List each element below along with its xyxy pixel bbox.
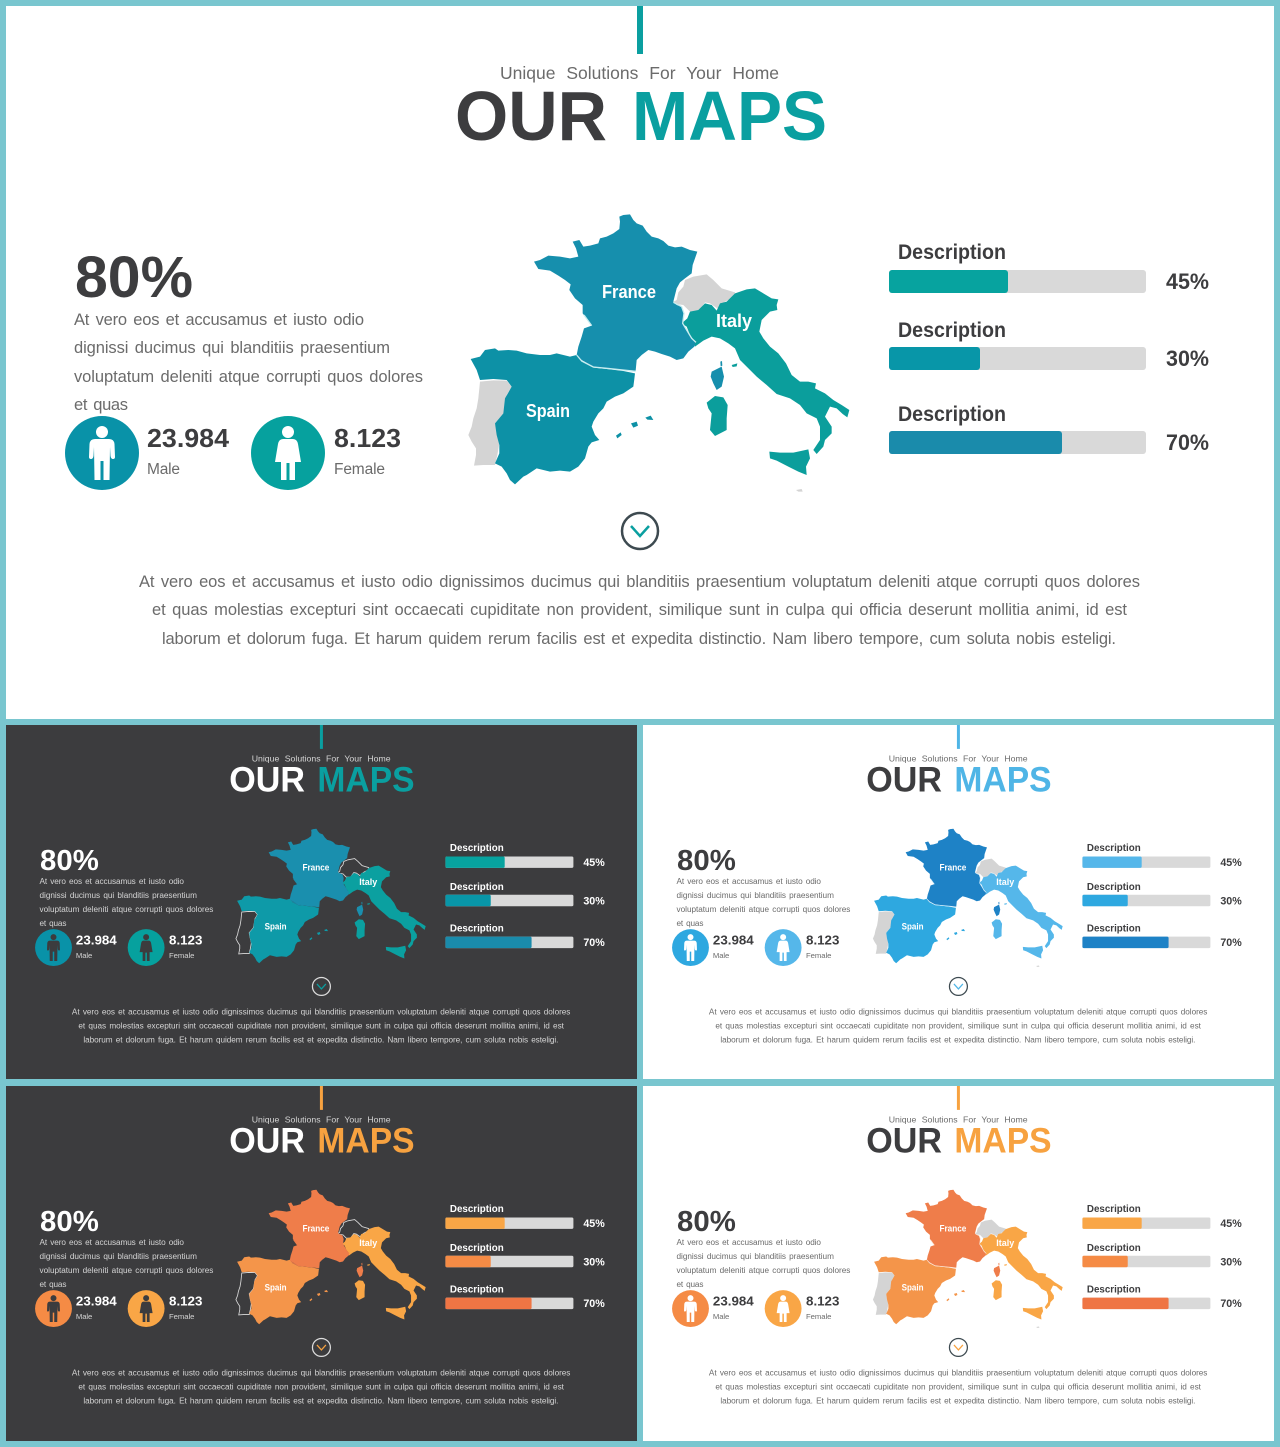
icon: chevron circle xyxy=(622,513,658,549)
bar 45%: Description xyxy=(898,241,1006,264)
bottom paragraph: laborum et dolorum fuga. Et harum quidem rerum facilis est et expedita distinctio. Nam libero tempore, cum soluta nobis esteligi. xyxy=(720,1036,1195,1045)
bar 70%: Description xyxy=(450,924,504,935)
slide: dark orange xyxy=(6,1086,637,1441)
female stat xyxy=(765,929,839,966)
icon: chevron circle xyxy=(949,977,967,995)
map: Italy xyxy=(359,877,377,887)
map: France xyxy=(302,862,329,872)
title: OUR xyxy=(229,761,305,800)
bar 30% xyxy=(1082,882,1242,907)
female stat: Female xyxy=(806,1312,831,1321)
male stat xyxy=(35,929,118,966)
map: Spain xyxy=(902,1283,924,1293)
bar 45%: 45% xyxy=(583,1218,605,1230)
male stat: Male xyxy=(713,951,729,960)
bar 70% xyxy=(1082,1285,1242,1310)
side text: At vero eos et accusamus et iusto odio xyxy=(677,877,821,886)
male stat: 23.984 xyxy=(713,1294,755,1309)
bar 45% xyxy=(1082,843,1242,869)
bar 70%: 70% xyxy=(1166,430,1209,455)
female stat: Female xyxy=(169,951,194,960)
bottom paragraph: et quas molestias excepturi sint occaecati cupiditate non provident, similique sunt in culpa qui officia deserunt mollitia animi, id est xyxy=(715,1382,1202,1391)
female stat: 8.123 xyxy=(169,933,202,948)
title xyxy=(229,1122,415,1161)
bottom paragraph: At vero eos et accusamus et iusto odio dignissimos ducimus qui blanditiis praesentium voluptatum deleniti atque corrupti quos dolores xyxy=(709,1368,1207,1377)
map: Spain xyxy=(265,922,287,932)
map: France xyxy=(939,1223,966,1233)
bar 30% xyxy=(889,319,1209,371)
icon: chevron circle xyxy=(312,977,330,995)
male stat: 23.984 xyxy=(76,933,118,948)
male stat: 23.984 xyxy=(713,933,755,948)
map xyxy=(873,829,1063,967)
bottom paragraph: At vero eos et accusamus et iusto odio dignissimos ducimus qui blanditiis praesentium voluptatum deleniti atque corrupti quos dolores xyxy=(72,1007,570,1016)
female stat xyxy=(128,1290,202,1327)
title xyxy=(866,1122,1052,1161)
subtitle: Unique Solutions For Your Home xyxy=(500,63,779,83)
bar 30%: Description xyxy=(450,882,504,893)
side text: voluptatum deleniti atque corrupti quos dolores xyxy=(40,905,213,914)
bar 30%: 30% xyxy=(583,895,605,907)
bar 30%: 30% xyxy=(583,1256,605,1268)
statistic 80%: 80% xyxy=(677,845,736,877)
bar 70%: Description xyxy=(898,403,1006,426)
male stat: Male xyxy=(76,1312,92,1321)
side text: voluptatum deleniti atque corrupti quos dolores xyxy=(40,1266,213,1275)
female stat: 8.123 xyxy=(169,1294,202,1309)
title: OUR xyxy=(866,1122,942,1161)
side text: At vero eos et accusamus et iusto odio xyxy=(40,877,184,886)
statistic 80%: 80% xyxy=(40,845,99,877)
statistic 80%: 80% xyxy=(40,1206,99,1238)
side text xyxy=(677,877,850,928)
side text xyxy=(74,311,423,414)
subtitle: Unique Solutions For Your Home xyxy=(889,753,1028,763)
title: OUR xyxy=(229,1122,305,1161)
map: Italy xyxy=(996,1238,1014,1248)
bar 30%: Description xyxy=(450,1243,504,1254)
bar 70%: 70% xyxy=(1220,937,1242,949)
side text: dignissi ducimus qui blanditiis praesentium xyxy=(40,891,197,900)
bar 30%: 30% xyxy=(1166,346,1209,371)
title: MAPS xyxy=(632,77,827,155)
title xyxy=(455,77,827,155)
bar 30%: 30% xyxy=(1220,895,1242,907)
bar 70%: 70% xyxy=(1220,1298,1242,1310)
statistic 80%: 80% xyxy=(677,1206,736,1238)
title: MAPS xyxy=(317,761,415,800)
side text: voluptatum deleniti atque corrupti quos dolores xyxy=(677,1266,850,1275)
subtitle: Unique Solutions For Your Home xyxy=(252,1114,391,1124)
female stat xyxy=(765,1290,839,1327)
top accent bar xyxy=(637,6,643,54)
male stat: 23.984 xyxy=(76,1294,118,1309)
map: Spain xyxy=(526,401,570,421)
side text: dignissi ducimus qui blanditiis praesentium xyxy=(677,1252,834,1261)
female stat: Female xyxy=(169,1312,194,1321)
bar 45%: Description xyxy=(450,843,504,854)
female stat: Female xyxy=(334,461,385,478)
bar 30% xyxy=(1082,1243,1242,1268)
bottom paragraph: et quas molestias excepturi sint occaecati cupiditate non provident, similique sunt in culpa qui officia deserunt mollitia animi, id est xyxy=(152,601,1127,619)
side text: et quas xyxy=(74,396,128,414)
bar 45%: 45% xyxy=(1220,857,1242,869)
bar 45% xyxy=(445,843,605,869)
map: Spain xyxy=(902,922,924,932)
bottom paragraph xyxy=(139,573,1140,648)
side text: At vero eos et accusamus et iusto odio xyxy=(40,1238,184,1247)
bottom paragraph xyxy=(72,1368,570,1406)
title: OUR xyxy=(455,77,607,155)
side text: dignissi ducimus qui blanditiis praesentium xyxy=(677,891,834,900)
bar 30%: Description xyxy=(1087,882,1141,893)
bottom paragraph: laborum et dolorum fuga. Et harum quidem rerum facilis est et expedita distinctio. Nam libero tempore, cum soluta nobis esteligi. xyxy=(83,1036,558,1045)
map xyxy=(873,1190,1063,1328)
map xyxy=(468,214,849,492)
bar 70% xyxy=(445,924,605,949)
bar 70% xyxy=(445,1285,605,1310)
bar 70%: 70% xyxy=(583,937,605,949)
bar 70%: 70% xyxy=(583,1298,605,1310)
bottom paragraph: et quas molestias excepturi sint occaecati cupiditate non provident, similique sunt in culpa qui officia deserunt mollitia animi, id est xyxy=(78,1382,565,1391)
male stat xyxy=(672,929,755,966)
map: France xyxy=(602,282,656,302)
side text: et quas xyxy=(677,1280,703,1289)
bottom paragraph: laborum et dolorum fuga. Et harum quidem rerum facilis est et expedita distinctio. Nam libero tempore, cum soluta nobis esteligi. xyxy=(162,630,1116,648)
bar 70% xyxy=(889,403,1209,455)
bar 30%: Description xyxy=(1087,1243,1141,1254)
slide: main light teal xyxy=(6,6,1274,719)
map xyxy=(236,829,426,967)
bar 70%: Description xyxy=(450,1285,504,1296)
top accent bar xyxy=(957,725,960,749)
side text: At vero eos et accusamus et iusto odio xyxy=(677,1238,821,1247)
bar 30% xyxy=(445,882,605,907)
female stat: 8.123 xyxy=(334,423,401,453)
side text: dignissi ducimus qui blanditiis praesentium xyxy=(40,1252,197,1261)
side text xyxy=(40,877,213,928)
side text: At vero eos et accusamus et iusto odio xyxy=(74,311,364,329)
male stat: Male xyxy=(147,461,180,478)
bar 30% xyxy=(445,1243,605,1268)
bottom paragraph: laborum et dolorum fuga. Et harum quidem rerum facilis est et expedita distinctio. Nam libero tempore, cum soluta nobis esteligi. xyxy=(720,1397,1195,1406)
bar 70%: Description xyxy=(1087,924,1141,935)
title: MAPS xyxy=(954,761,1052,800)
male stat xyxy=(65,416,230,490)
male stat xyxy=(672,1290,755,1327)
map xyxy=(236,1190,426,1328)
side text: et quas xyxy=(677,919,703,928)
female stat xyxy=(251,416,401,490)
icon: chevron circle xyxy=(312,1338,330,1356)
map: France xyxy=(939,862,966,872)
bar 45%: 45% xyxy=(1220,1218,1242,1230)
bar 30%: Description xyxy=(898,319,1006,342)
bar 45%: Description xyxy=(1087,1204,1141,1215)
bottom paragraph xyxy=(709,1007,1207,1045)
bar 45% xyxy=(445,1204,605,1230)
map: France xyxy=(302,1223,329,1233)
bar 45%: Description xyxy=(1087,843,1141,854)
title: MAPS xyxy=(317,1122,415,1161)
subtitle: Unique Solutions For Your Home xyxy=(889,1114,1028,1124)
side text: et quas xyxy=(40,1280,66,1289)
map: Italy xyxy=(359,1238,377,1248)
title: MAPS xyxy=(954,1122,1052,1161)
bottom paragraph: At vero eos et accusamus et iusto odio dignissimos ducimus qui blanditiis praesentium voluptatum deleniti atque corrupti quos dolores xyxy=(709,1007,1207,1016)
male stat: Male xyxy=(713,1312,729,1321)
bar 45% xyxy=(1082,1204,1242,1230)
title: OUR xyxy=(866,761,942,800)
bar 70%: Description xyxy=(1087,1285,1141,1296)
bottom paragraph: et quas molestias excepturi sint occaecati cupiditate non provident, similique sunt in culpa qui officia deserunt mollitia animi, id est xyxy=(78,1021,565,1030)
bottom paragraph: At vero eos et accusamus et iusto odio dignissimos ducimus qui blanditiis praesentium voluptatum deleniti atque corrupti quos dolores xyxy=(139,573,1140,591)
bottom paragraph: et quas molestias excepturi sint occaecati cupiditate non provident, similique sunt in culpa qui officia deserunt mollitia animi, id est xyxy=(715,1021,1202,1030)
side text xyxy=(677,1238,850,1289)
side text: et quas xyxy=(40,919,66,928)
top accent bar xyxy=(320,1086,323,1110)
female stat xyxy=(128,929,202,966)
bottom paragraph: laborum et dolorum fuga. Et harum quidem rerum facilis est et expedita distinctio. Nam libero tempore, cum soluta nobis esteligi. xyxy=(83,1397,558,1406)
slide: dark teal xyxy=(6,725,637,1079)
top accent bar xyxy=(320,725,323,749)
bottom paragraph xyxy=(709,1368,1207,1406)
top accent bar xyxy=(957,1086,960,1110)
bar 45%: Description xyxy=(450,1204,504,1215)
female stat: 8.123 xyxy=(806,1294,839,1309)
bottom paragraph xyxy=(72,1007,570,1045)
female stat: 8.123 xyxy=(806,933,839,948)
map: Italy xyxy=(716,311,752,331)
bar 45%: 45% xyxy=(1166,269,1209,294)
side text: voluptatum deleniti atque corrupti quos dolores xyxy=(677,905,850,914)
icon: chevron circle xyxy=(949,1338,967,1356)
bottom paragraph: At vero eos et accusamus et iusto odio dignissimos ducimus qui blanditiis praesentium voluptatum deleniti atque corrupti quos dolores xyxy=(72,1368,570,1377)
title xyxy=(866,761,1052,800)
bar 45% xyxy=(889,241,1209,294)
map: Spain xyxy=(265,1283,287,1293)
male stat: Male xyxy=(76,951,92,960)
side text xyxy=(40,1238,213,1289)
bar 45%: 45% xyxy=(583,857,605,869)
female stat: Female xyxy=(806,951,831,960)
male stat xyxy=(35,1290,118,1327)
slide: light orange xyxy=(643,1086,1274,1441)
bar 30%: 30% xyxy=(1220,1256,1242,1268)
subtitle: Unique Solutions For Your Home xyxy=(252,753,391,763)
male stat: 23.984 xyxy=(147,423,230,453)
side text: dignissi ducimus qui blanditiis praesentium xyxy=(74,339,390,357)
slide: light blue xyxy=(643,725,1274,1079)
bar 70% xyxy=(1082,924,1242,949)
statistic 80%: 80% xyxy=(75,245,193,310)
side text: voluptatum deleniti atque corrupti quos dolores xyxy=(74,368,423,386)
map: Italy xyxy=(996,877,1014,887)
title xyxy=(229,761,415,800)
